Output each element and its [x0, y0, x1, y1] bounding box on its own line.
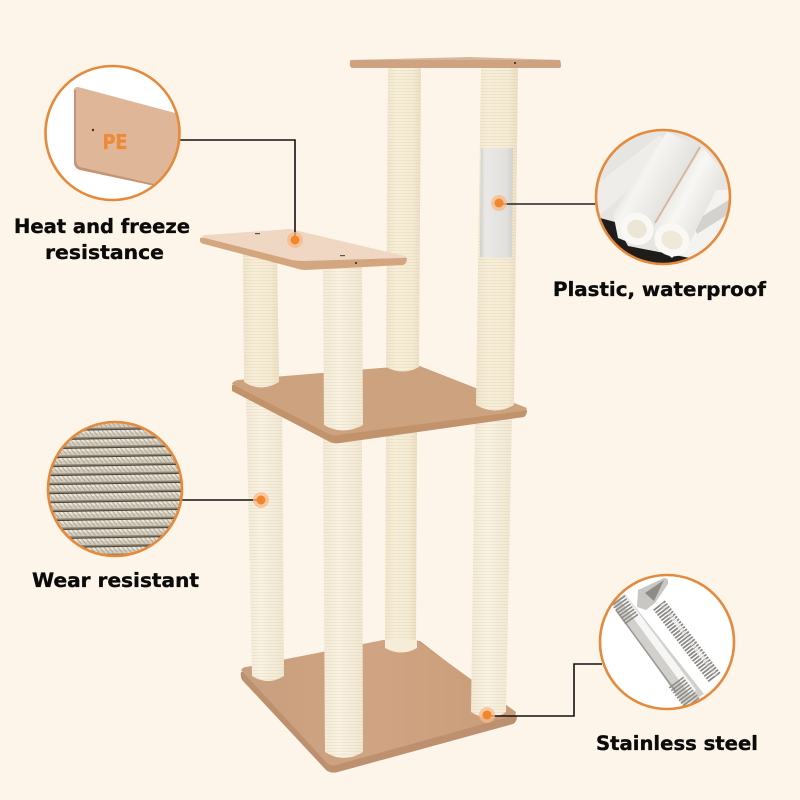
- heading: plastic, waterproof: Plastic, waterproof: [553, 278, 767, 301]
- left lower post: [246, 395, 284, 681]
- marker dot: rope: [253, 492, 269, 508]
- heading: stainless steel: Stainless steel: [596, 732, 758, 755]
- right upper post: [476, 67, 518, 410]
- base board: [241, 640, 517, 773]
- front lower post: [323, 435, 363, 758]
- middle board: [232, 365, 527, 443]
- heading: heat and freeze resistance: resistance: [45, 241, 164, 264]
- connector line: rope: [182, 499, 261, 501]
- back lower post: [385, 425, 417, 652]
- left upper post: [243, 250, 279, 388]
- cat tree: [200, 57, 561, 773]
- front upper post: [323, 262, 363, 430]
- detail circle: plastic tubes: [596, 130, 735, 270]
- callout: wear resistant: [32, 422, 269, 592]
- detail circle: PE board: [46, 66, 190, 200]
- heading: heat and freeze resistance: [14, 215, 190, 264]
- callout: stainless steel: [479, 575, 758, 755]
- callout: plastic, waterproof: [491, 130, 767, 301]
- plastic window: [480, 148, 513, 258]
- back upper post: [386, 67, 421, 372]
- marker dot: PE: [287, 232, 303, 248]
- heading: heat and freeze resistance: Heat and freeze: [14, 215, 190, 238]
- connector line: steel: [487, 664, 602, 716]
- small shelf: [200, 229, 407, 270]
- detail circle: sisal rope: [48, 422, 182, 556]
- detail circle: steel bolts: [600, 575, 734, 709]
- marker dot: steel: [479, 707, 495, 723]
- right lower post: [471, 415, 512, 718]
- connector line: PE: [180, 140, 295, 240]
- callout: heat and freeze resistance: [14, 66, 303, 264]
- connector line: plastic: [500, 203, 596, 205]
- PE label: PE: [102, 130, 128, 154]
- back lower post foot: [385, 640, 417, 652]
- top board: [350, 57, 561, 68]
- marker dot: plastic: [491, 195, 507, 211]
- heading: wear resistant: Wear resistant: [32, 569, 199, 592]
